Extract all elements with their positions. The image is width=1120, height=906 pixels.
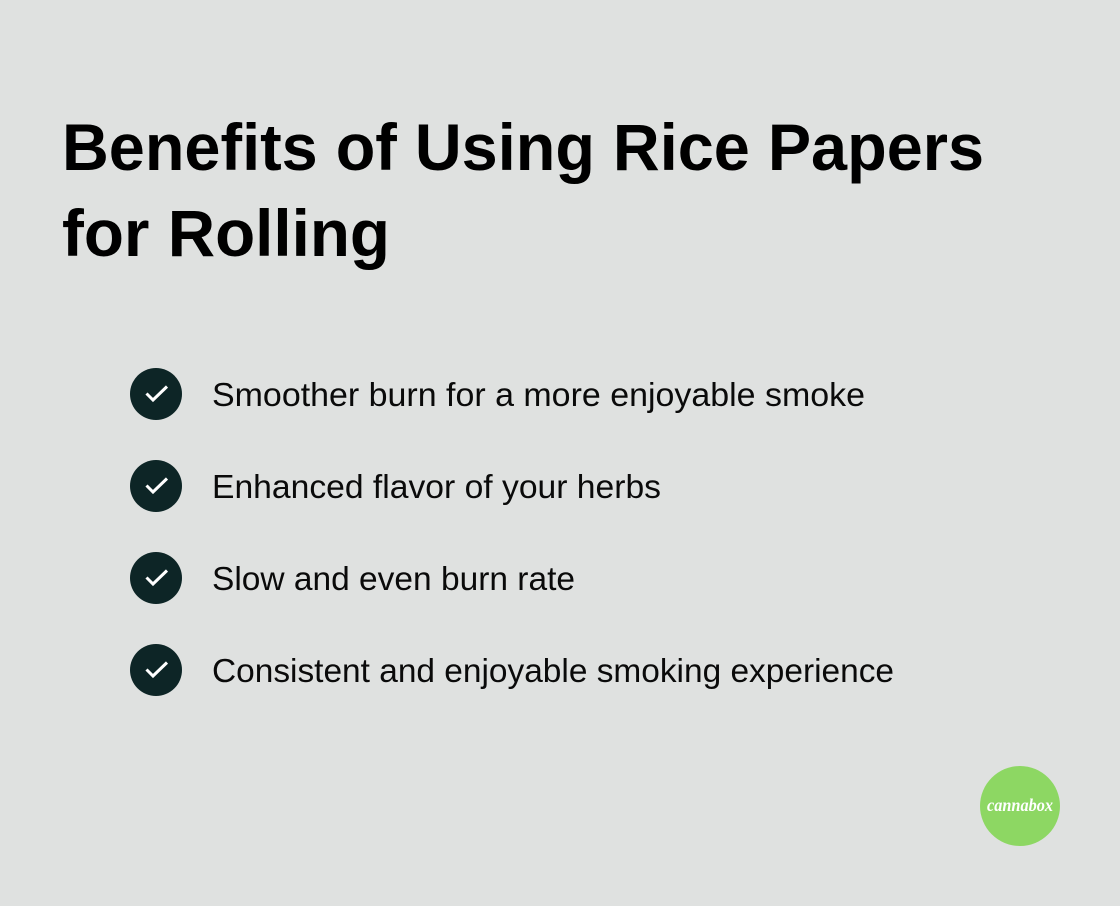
checklist — [130, 368, 894, 696]
item: slow burn rate: Slow and even burn rate — [212, 560, 575, 597]
item: enhanced flavor — [130, 460, 661, 512]
item: enhanced flavor: Enhanced flavor of your herbs — [212, 468, 661, 505]
title: for Rolling — [62, 196, 390, 270]
item: consistent experience — [130, 644, 894, 696]
item: slow burn rate — [130, 552, 575, 604]
item: smoother burn — [130, 368, 865, 420]
logo: cannabox badge: cannabox — [987, 795, 1053, 815]
item: consistent experience: Consistent and enjoyable smoking experience — [212, 652, 894, 689]
title — [62, 110, 984, 270]
item: smoother burn: Smoother burn for a more enjoyable smoke — [212, 376, 865, 413]
logo: cannabox badge — [980, 766, 1060, 846]
title: Benefits of Using Rice Papers — [62, 110, 984, 184]
